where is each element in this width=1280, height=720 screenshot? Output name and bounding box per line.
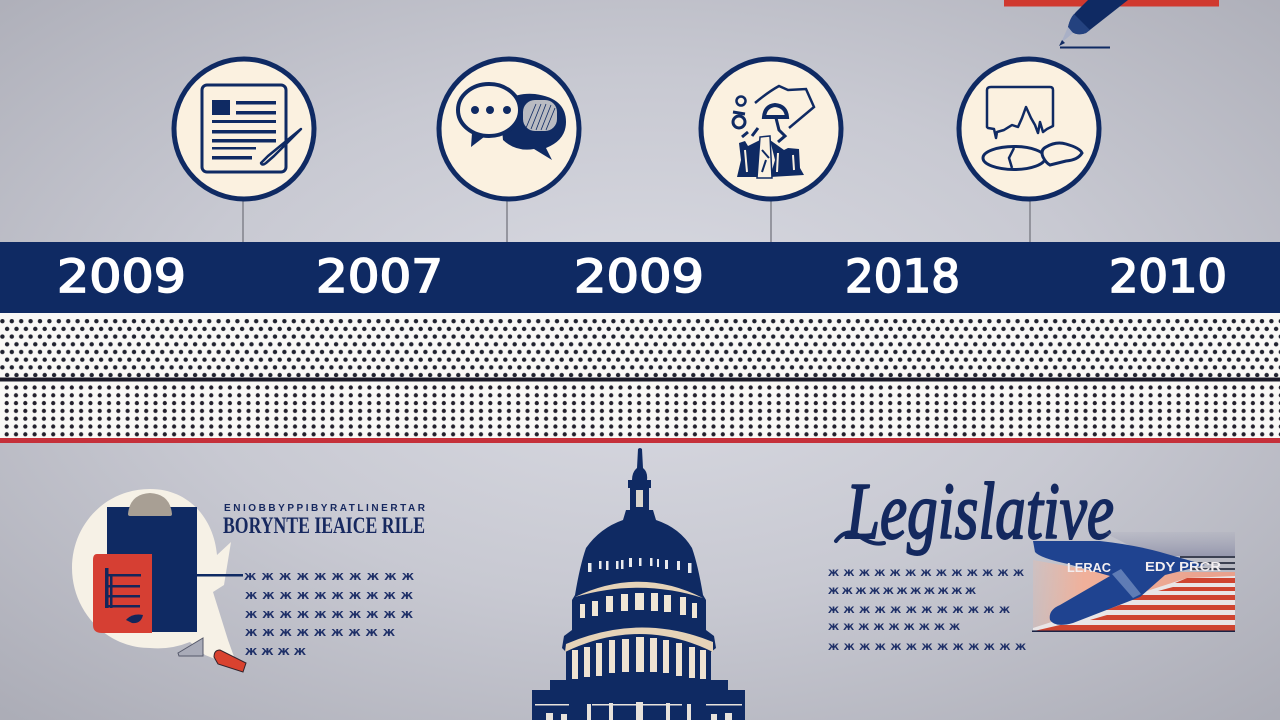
right body text: ЖЖЖЖЖЖЖЖЖЖЖ (828, 587, 976, 597)
year labels: 2010 (1109, 250, 1227, 303)
year labels: 2009 (574, 250, 704, 303)
icon: monument (701, 59, 841, 199)
top right pen and red banner (1004, 0, 1219, 48)
lantern window (636, 490, 643, 507)
flag and pen illustration (1032, 532, 1235, 632)
left body text (244, 572, 415, 658)
left heading text: BORYNTE IEAICE RILE (223, 513, 425, 538)
base entrance (535, 702, 742, 720)
left body text: ЖЖЖЖЖЖЖЖЖЖ (245, 591, 414, 602)
connector line (197, 574, 243, 576)
left heading text: ENIOBBYPPIBYRATLINERTAR (224, 503, 426, 514)
flag and pen illustration: LERAC (1067, 560, 1112, 575)
right body text: ЖЖЖЖЖЖЖЖЖЖЖЖЖ (828, 569, 1024, 579)
right body text: ЖЖЖЖЖЖЖЖЖЖЖЖЖ (828, 643, 1026, 653)
timeline connector lines (243, 200, 1030, 243)
left body text: ЖЖЖЖЖЖЖЖЖЖ (244, 572, 415, 583)
left body text: ЖЖЖЖЖЖЖЖЖ (245, 628, 396, 639)
right body text: ЖЖЖЖЖЖЖЖЖ (828, 623, 960, 633)
flag and pen illustration: ЕDY PRCR (1145, 559, 1222, 574)
drum windows (580, 593, 697, 618)
silhouette (532, 448, 745, 720)
dome band (575, 582, 703, 598)
capitol building (532, 448, 745, 720)
upper windows (588, 558, 692, 573)
left body text: ЖЖЖЖЖЖЖЖЖЖ (245, 610, 414, 621)
right body text: ЖЖЖЖЖЖЖЖЖЖЖЖ (828, 606, 1010, 616)
year labels: 2007 (316, 250, 443, 303)
left body text: ЖЖЖЖ (245, 647, 307, 658)
lower dome band (565, 627, 713, 652)
halftone dot bands (0, 313, 1280, 443)
icon: document with pen (174, 59, 314, 199)
left heading text (223, 503, 426, 538)
timeline bar (0, 242, 1280, 313)
year labels: 2018 (845, 250, 960, 303)
icon: chart screen and ovals (959, 59, 1099, 199)
icon: speech bubbles (439, 59, 579, 199)
right body text (828, 569, 1026, 653)
colonnade (572, 637, 706, 679)
Legislative script title: Legislative (845, 468, 1114, 556)
year labels (57, 250, 1227, 303)
year labels: 2009 (57, 250, 186, 303)
clipboard illustration (72, 489, 246, 672)
